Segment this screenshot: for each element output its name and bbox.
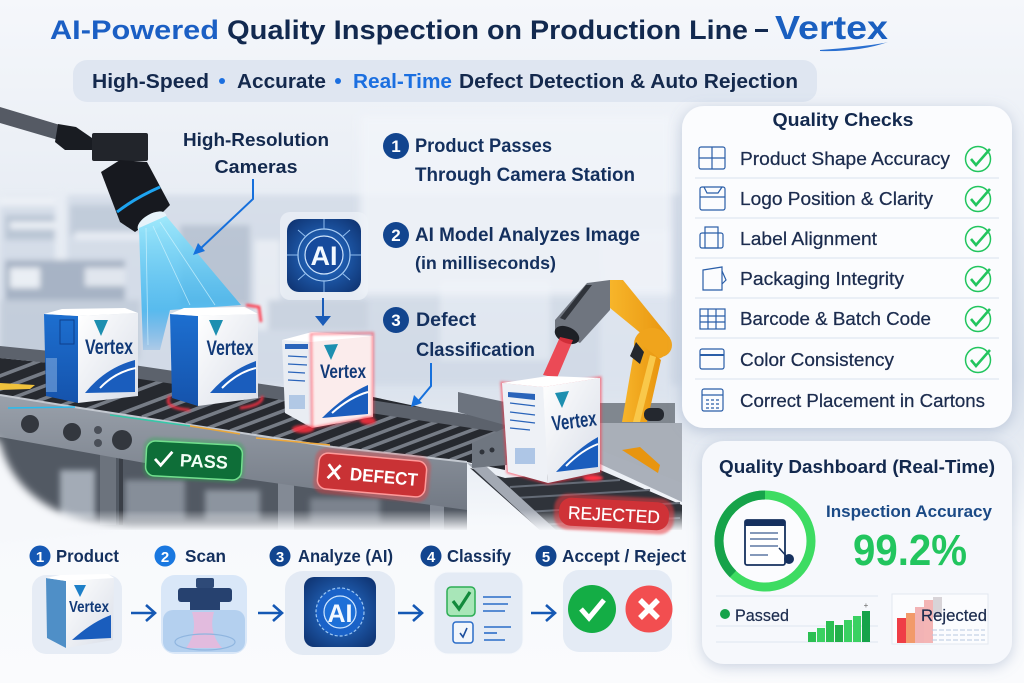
subtitle pill: Accurate: [237, 70, 326, 93]
product box 2: Vertex: [206, 337, 254, 360]
rejected chart: Rejected: [921, 606, 987, 625]
check labels: Correct Placement in Cartons: [740, 390, 985, 411]
green check marks: [966, 146, 990, 372]
title: Vertex: [775, 9, 889, 46]
product box 1: Vertex: [85, 336, 133, 359]
callout: high-resolution cameras: Cameras: [214, 156, 298, 177]
check labels: Product Shape Accuracy: [740, 148, 951, 169]
flow step headings: Classify: [447, 546, 511, 566]
red beam: [543, 337, 573, 378]
accuracy value: [826, 503, 993, 575]
flow step headings: Scan: [185, 546, 226, 566]
product box 1: [44, 308, 138, 403]
badge: pass: [142, 436, 246, 484]
flow step headings: Accept / Reject: [562, 546, 686, 566]
AI chip icon: AI: [310, 241, 338, 271]
callout: high-resolution cameras: [183, 129, 329, 255]
subtitle pill: Defect Detection & Auto Rejection: [459, 70, 798, 93]
badge: defect: DEFECT: [349, 464, 419, 490]
accuracy value: 99.2%: [853, 526, 967, 575]
camera assembly: [0, 107, 241, 350]
rejected chart: [892, 594, 988, 644]
check labels: Packaging Integrity: [740, 268, 905, 289]
flow tile: accept or reject: [563, 570, 672, 652]
step 3 text: [383, 307, 535, 407]
flow step headings: Product: [56, 546, 119, 566]
flow step headings: 5: [542, 549, 550, 566]
check labels: Logo Position & Clarity: [740, 188, 934, 209]
passed chart: Passed: [735, 606, 789, 625]
flow arrow 2: [258, 605, 282, 621]
step 1 text: Through Camera Station: [415, 165, 635, 186]
product box 3: [282, 332, 376, 433]
accuracy value: Inspection Accuracy: [826, 503, 993, 521]
flow tile: scan: [161, 575, 247, 654]
flow tile: AI: [285, 571, 395, 655]
heading: quality checks: Quality Checks: [772, 109, 914, 130]
step 3 text: Classification: [416, 340, 535, 361]
title: AI-Powered: [50, 15, 219, 45]
accuracy ring: [719, 495, 811, 587]
flow step headings: Analyze (AI): [298, 546, 393, 566]
check labels: Label Alignment: [740, 228, 877, 249]
product box 3: Vertex: [320, 362, 366, 383]
subtitle pill: Real-Time: [353, 70, 452, 93]
row icons: [699, 147, 726, 411]
conveyor: main line: [0, 346, 505, 530]
flow arrow 3: [398, 605, 422, 621]
title: Quality Inspection: [227, 15, 479, 45]
product box 2: [168, 305, 262, 410]
step 2 text: AI Model Analyzes Image: [415, 225, 640, 246]
callout: high-resolution cameras: High-Resolution: [183, 129, 329, 150]
product box 4 rejected: Vertex: [550, 407, 598, 436]
subtitle pill: High-Speed: [92, 70, 209, 93]
machinery under the belt: [0, 430, 467, 530]
passed chart: +: [864, 601, 869, 610]
step 2 text: [383, 222, 640, 273]
flow step headings: 3: [276, 549, 284, 566]
fade of machinery into page: [0, 425, 682, 545]
product box 4 rejected: [502, 376, 603, 483]
belt surface: [0, 358, 505, 470]
flow tile: AI: AI: [328, 600, 352, 628]
check labels: [740, 148, 985, 411]
flow step headings: 4: [427, 549, 436, 566]
AI chip icon: [280, 212, 368, 326]
flow tile: classify: [434, 572, 523, 654]
step 1 text: 1: [391, 137, 401, 156]
badge: defect: [312, 447, 432, 503]
step 1 text: Product Passes: [415, 136, 552, 157]
title: on Production Line: [487, 15, 748, 45]
flow tile: product: [32, 574, 122, 654]
bolts: [21, 415, 39, 433]
subtitle pill: [73, 60, 817, 102]
step 3 text: Defect: [416, 310, 477, 331]
flow step headings: [30, 546, 686, 566]
robot arm: [543, 280, 672, 422]
flow arrow 4: [531, 605, 555, 621]
title: [50, 9, 889, 51]
blurred factory background: [0, 190, 680, 390]
pale panel behind steps: [360, 115, 672, 295]
passed chart: [716, 596, 878, 642]
step 2 text: 2: [391, 226, 401, 245]
badge: pass: PASS: [179, 450, 228, 473]
heading: dashboard: Quality Dashboard (Real-Time): [719, 456, 995, 477]
step 1 text: [383, 133, 635, 186]
flow tile: product: Vertex: [69, 599, 109, 616]
light cone: [139, 216, 241, 350]
step 3 text: 3: [391, 311, 401, 330]
back rail: [0, 346, 505, 433]
flow step headings: 1: [36, 549, 44, 566]
panel: quality checks: [682, 106, 1012, 428]
check labels: Barcode & Batch Code: [740, 308, 931, 329]
badge: rejected: [553, 493, 675, 535]
flow arrow 1: [131, 605, 155, 621]
step 2 text: (in milliseconds): [415, 253, 556, 273]
flow step headings: 2: [161, 549, 169, 566]
panel: quality dashboard: [702, 441, 1012, 664]
badge: rejected: REJECTED: [567, 503, 660, 527]
front rail: [0, 395, 467, 510]
check labels: Color Consistency: [740, 349, 895, 370]
conveyor: reject line: [458, 392, 682, 530]
